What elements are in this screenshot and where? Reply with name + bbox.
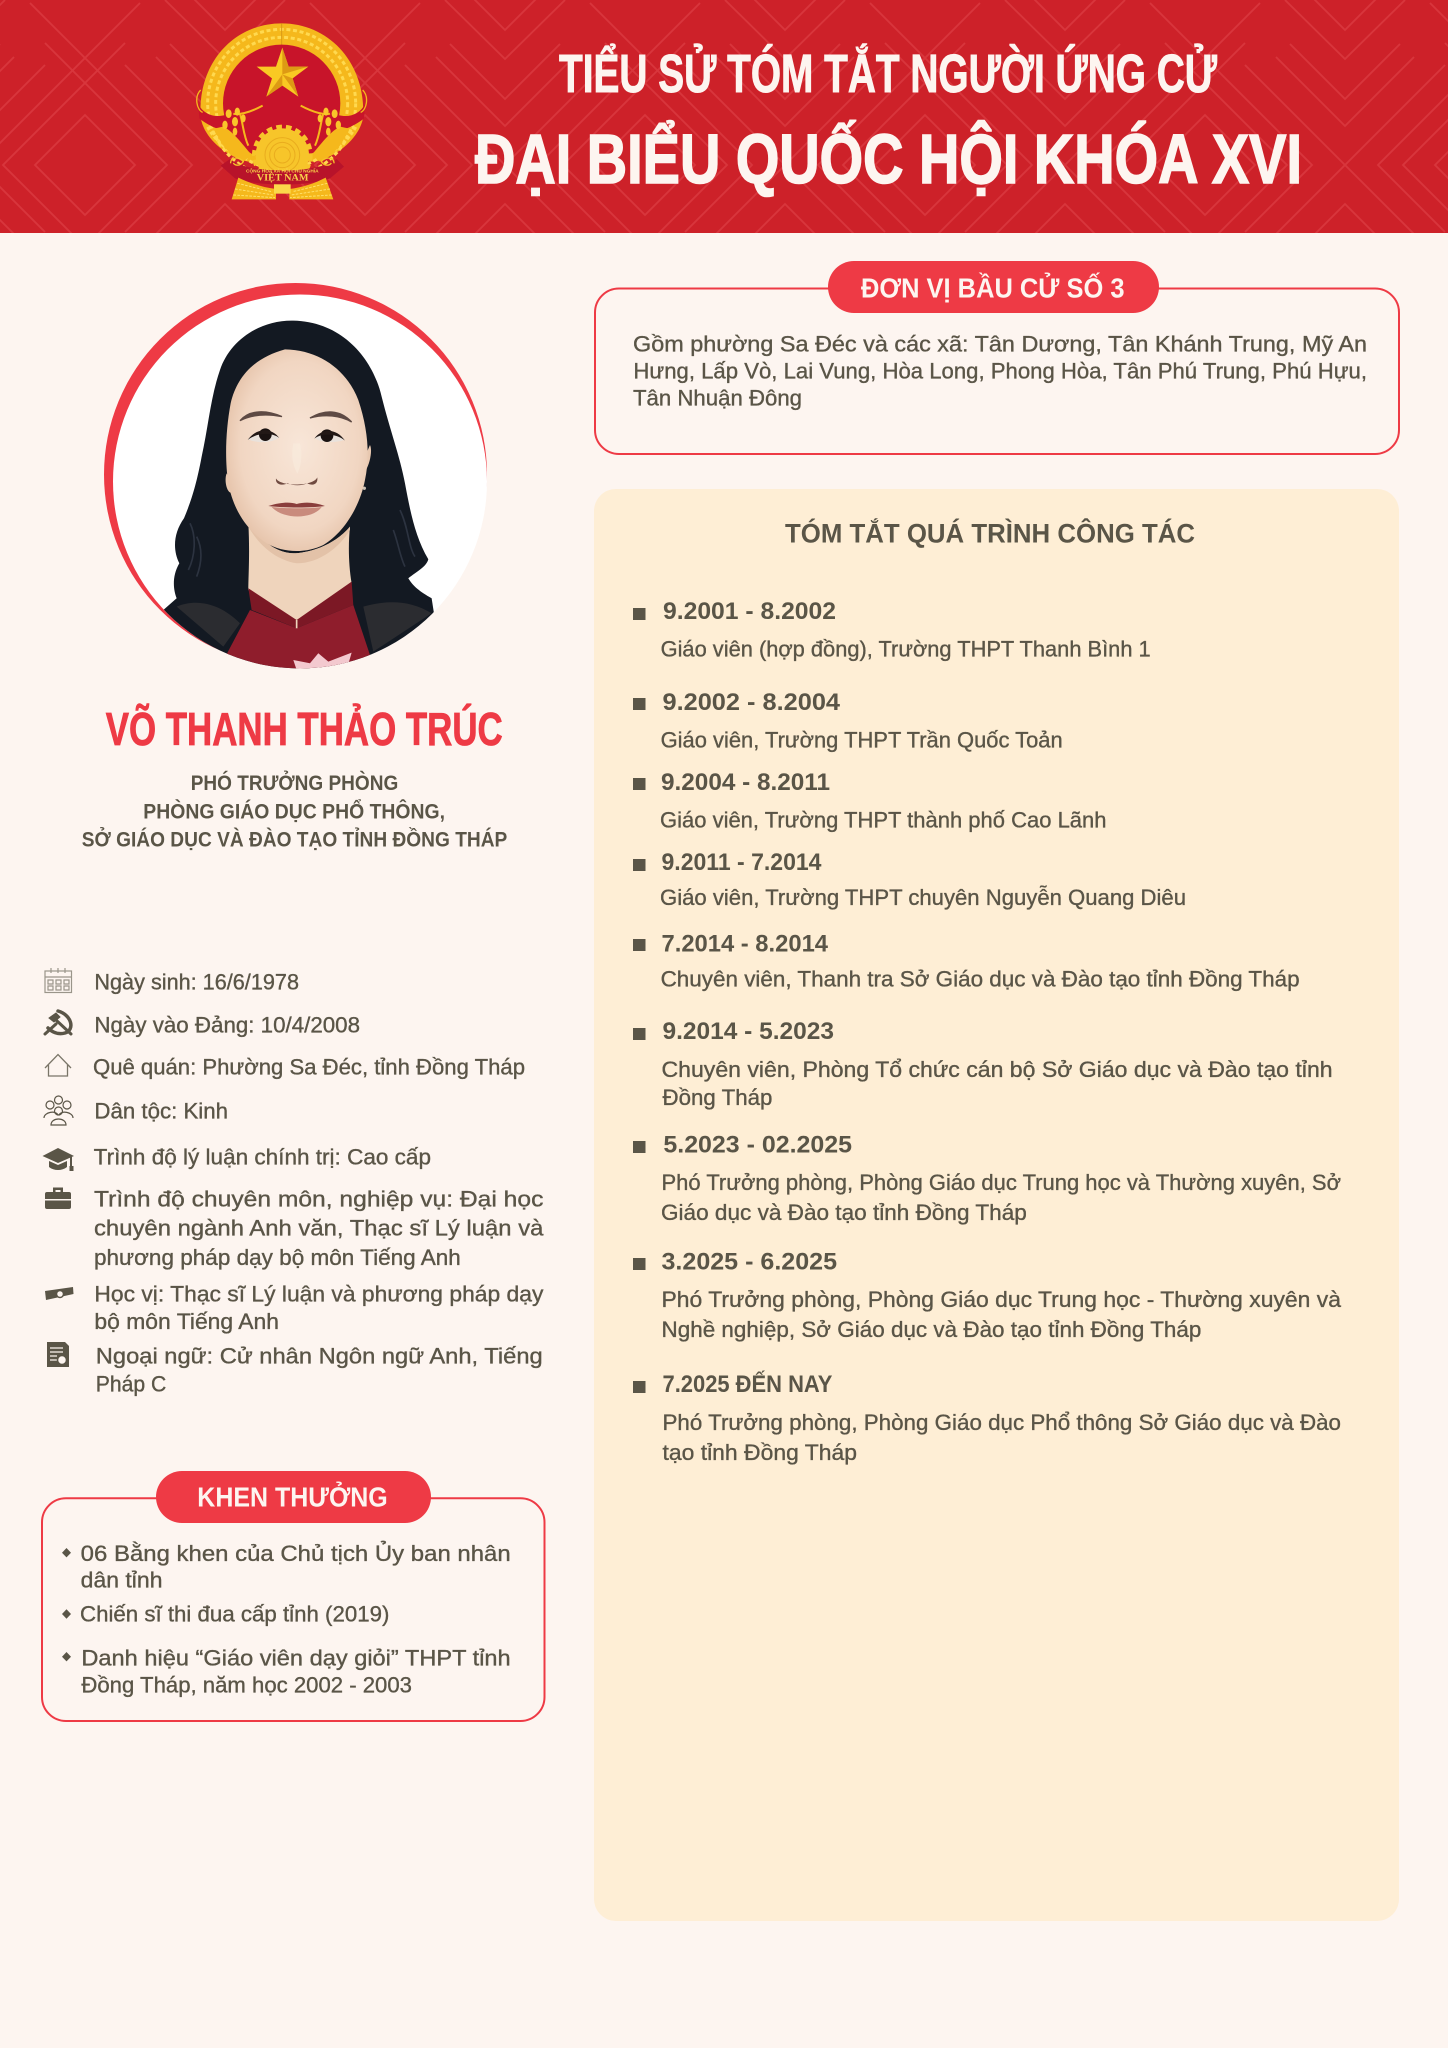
entry: 2025 to present (633, 1370, 1341, 1465)
header banner (0, 0, 1448, 233)
entry: 2025 to present: Phó Trưởng phòng, Phòng Giáo dục Phổ thông Sở Giáo dục và Đào (662, 1410, 1341, 1435)
entry: 2002-2004: 9.2002 - 8.2004 (662, 689, 841, 716)
entry: 2014-2023: Đồng Tháp (662, 1085, 772, 1110)
entry: 2014-2023 (633, 1018, 1333, 1110)
hometown: Quê quán: Phường Sa Đéc, tỉnh Đồng Tháp (93, 1054, 525, 1079)
candidate position: SỞ GIÁO DỤC VÀ ĐÀO TẠO TỈNH ĐỒNG THÁP (82, 828, 507, 852)
work history heading: TÓM TẮT QUÁ TRÌNH CÔNG TÁC (785, 518, 1195, 549)
emblem inscription: CỘNG HÒA XÃ HỘI CHỦ NGHĨA (246, 166, 319, 174)
icon: certificate (47, 1342, 69, 1367)
entry: 2014 (633, 931, 1300, 992)
entry: 2023-2025: Giáo dục và Đào tạo tỉnh Đồng Tháp (661, 1200, 1027, 1225)
entry: 2025 (633, 1248, 1342, 1342)
foreign languages: Ngoại ngữ: Cử nhân Ngôn ngữ Anh, Tiếng (96, 1343, 543, 1368)
constituency description: Tân Nhuận Đông (633, 386, 802, 411)
entry: 2025 to present: 7.2025 ĐẾN NAY (662, 1370, 832, 1398)
constituency pill heading (828, 261, 1159, 313)
award 1 (62, 1541, 511, 1593)
entry: 2011-2014 (633, 849, 1186, 910)
icon: people (44, 1096, 73, 1125)
entry: 2001-2002: 9.2001 - 8.2002 (663, 598, 836, 625)
awards pill heading: KHEN THƯỞNG (197, 1481, 388, 1513)
entry: 2004-2011 (633, 769, 1106, 833)
award 3: Danh hiệu “Giáo viên dạy giỏi” THPT tỉnh (81, 1646, 511, 1671)
award 1: dân tỉnh (81, 1568, 162, 1593)
icon: hammer and sickle (45, 1011, 71, 1034)
constituency pill heading: ĐƠN VỊ BẦU CỬ SỐ 3 (861, 272, 1124, 304)
foreign languages: Pháp C (96, 1372, 166, 1397)
title line 1: TIỂU SỬ TÓM TẮT NGƯỜI ỨNG CỬ (559, 43, 1217, 104)
academic degree: bộ môn Tiếng Anh (94, 1309, 279, 1334)
icon: graduation cap (42, 1148, 74, 1171)
foreign languages (96, 1343, 543, 1397)
birth date: Ngày sinh: 16/6/1978 (94, 969, 299, 994)
entry: 2025 to present: tạo tỉnh Đồng Tháp (662, 1440, 857, 1465)
professional qualification (94, 1187, 544, 1270)
panel: constituency (595, 261, 1399, 454)
entry: 2001-2002 (633, 598, 1151, 662)
entry: 2014: Chuyên viên, Thanh tra Sở Giáo dục và Đào tạo tỉnh Đồng Tháp (661, 967, 1300, 992)
entry: 2025: 3.2025 - 6.2025 (662, 1248, 837, 1275)
academic degree (94, 1282, 543, 1334)
entry: 2014: 7.2014 - 8.2014 (662, 931, 829, 958)
entry: 2011-2014: Giáo viên, Trường THPT chuyên Nguyễn Quang Diêu (660, 885, 1186, 910)
candidate position: PHÒNG GIÁO DỤC PHỔ THÔNG, (143, 799, 445, 823)
candidate position: PHÓ TRƯỞNG PHÒNG (191, 771, 398, 795)
entry: 2004-2011: 9.2004 - 8.2011 (661, 769, 830, 796)
entry: 2004-2011: Giáo viên, Trường THPT thành phố Cao Lãnh (660, 808, 1106, 833)
entry: 2025: Nghề nghiệp, Sở Giáo dục và Đào tạo tỉnh Đồng Tháp (662, 1317, 1201, 1342)
entry: 2023-2025: Phó Trưởng phòng, Phòng Giáo dục Trung học và Thường xuyên, Sở (662, 1170, 1341, 1195)
ethnicity: Dân tộc: Kinh (94, 1098, 228, 1123)
professional qualification: Trình độ chuyên môn, nghiệp vụ: Đại học (94, 1187, 543, 1212)
icon: briefcase (45, 1188, 71, 1209)
entry: 2023-2025: 5.2023 - 02.2025 (663, 1131, 852, 1158)
award 2: Chiến sĩ thi đua cấp tỉnh (2019) (80, 1602, 389, 1627)
personal details (42, 968, 544, 1397)
icon: diploma (45, 1287, 74, 1300)
panel: awards (42, 1471, 544, 1721)
award 3: Đồng Tháp, năm học 2002 - 2003 (81, 1673, 412, 1698)
award 1: 06 Bằng khen của Chủ tịch Ủy ban nhân (81, 1541, 511, 1566)
political theory level: Trình độ lý luận chính trị: Cao cấp (94, 1144, 431, 1169)
candidate position (82, 771, 507, 852)
awards pill heading (156, 1471, 431, 1523)
icon: home (45, 1054, 71, 1076)
entry: 2011-2014: 9.2011 - 7.2014 (662, 849, 822, 876)
candidate name: VÕ THANH THẢO TRÚC (106, 703, 503, 755)
entry: 2014-2023: 9.2014 - 5.2023 (662, 1018, 834, 1045)
constituency description: Hưng, Lấp Vò, Lai Vung, Hòa Long, Phong Hòa, Tân Phú Trung, Phú Hựu, (633, 358, 1367, 383)
professional qualification: chuyên ngành Anh văn, Thạc sĩ Lý luận và (94, 1216, 544, 1241)
entry: 2002-2004 (633, 689, 1063, 753)
academic degree: Học vị: Thạc sĩ Lý luận và phương pháp dạy (94, 1282, 543, 1307)
icon: national emblem (197, 23, 367, 199)
constituency description: Gồm phường Sa Đéc và các xã: Tân Dương, Tân Khánh Trung, Mỹ An (633, 332, 1367, 357)
entry: 2023-2025 (633, 1131, 1341, 1225)
constituency description (633, 332, 1367, 411)
professional qualification: phương pháp dạy bộ môn Tiếng Anh (94, 1245, 461, 1270)
entry: 2002-2004: Giáo viên, Trường THPT Trần Quốc Toản (661, 728, 1063, 753)
party entry date: Ngày vào Đảng: 10/4/2008 (94, 1012, 360, 1037)
emblem name: VIỆT NAM (257, 171, 309, 184)
award 3 (62, 1646, 511, 1698)
entry: 2014-2023: Chuyên viên, Phòng Tổ chức cán bộ Sở Giáo dục và Đào tạo tỉnh (662, 1057, 1333, 1082)
portrait photo (104, 283, 487, 683)
entry: 2025: Phó Trưởng phòng, Phòng Giáo dục Trung học - Thường xuyên và (662, 1287, 1342, 1312)
icon: calendar (45, 968, 72, 992)
entry: 2001-2002: Giáo viên (hợp đồng), Trường THPT Thanh Bình 1 (661, 637, 1151, 662)
panel: work history (594, 489, 1399, 1921)
